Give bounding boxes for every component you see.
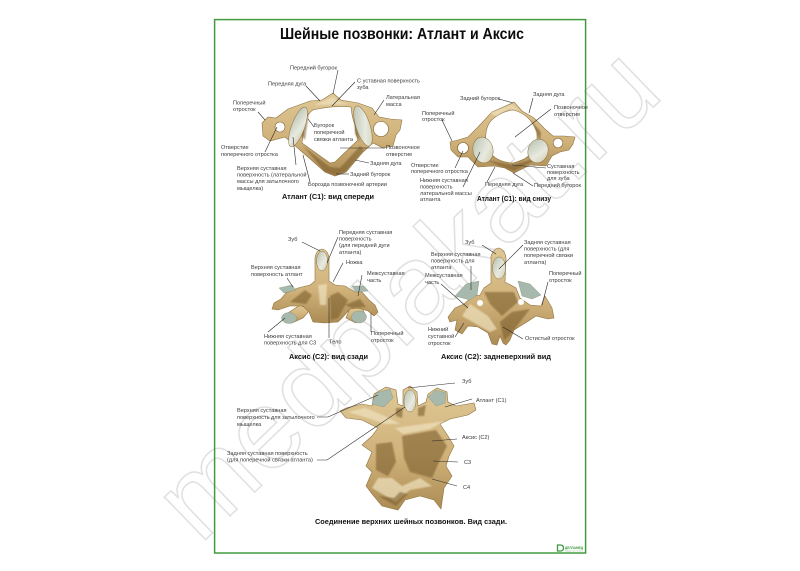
poster frame (215, 20, 586, 553)
label: верхняя суставная поверхность: мыщелка) (237, 186, 263, 192)
label: нижний суставной отросток: Нижний (428, 326, 448, 333)
label: позвоночное отверстие: отверстие (554, 112, 580, 118)
label: верхняя суставная поверхность: массы для затылочного (237, 179, 299, 185)
label: поперечный отросток (371, 313, 403, 344)
label: передняя дуга (268, 82, 320, 101)
label: задний бугорок (460, 95, 513, 103)
label: тело (329, 298, 341, 346)
label: поперечный отросток: отросток (422, 117, 445, 123)
label: верхняя суставная поверхность: поверхность для затылочного (237, 415, 315, 421)
label: позвоночное отверстие: Позвоночное (386, 145, 420, 151)
label: остистый отросток: Остистый отросток (525, 335, 575, 342)
label: бугорок поперечной связки: поперечной (314, 129, 345, 136)
label: нижняя суставная поверхность (264, 318, 316, 346)
label: бугорок поперечной связки (308, 119, 354, 143)
label: верхняя суставная поверхность: поверхность для (431, 258, 475, 264)
label: нижняя суставная поверхность (420, 152, 480, 203)
label: позвоночное отверстие: отверстие (386, 152, 412, 158)
panel: atlas front view (221, 64, 420, 201)
label: отверстие поперечного отростка (411, 151, 469, 175)
label: поперечный отросток (422, 110, 454, 141)
label: C3: С3 (464, 460, 471, 466)
illustration: atlas front (262, 93, 402, 176)
label: ножка: Ножка (346, 260, 363, 266)
publisher logo: ДЕЛЛАМЕД (565, 546, 584, 550)
label: латеральная масса: Латеральная (386, 95, 420, 101)
caption: junction: Соединение верхних шейных позвонков. Вид сзади. (315, 517, 507, 526)
label: передняя дуга (485, 167, 524, 188)
label: поперечный отросток: Поперечный (233, 100, 265, 106)
label: поперечный отросток: Поперечный (371, 330, 403, 337)
label: верхняя суставная поверхность: поверхность (латеральной (237, 172, 306, 178)
label: нижний суставной отросток (428, 323, 464, 347)
caption: axis posterior: Аксис (С2): вид сзади (289, 352, 368, 361)
label: атлант C1 (445, 398, 507, 407)
label: позвоночное отверстие (340, 145, 420, 158)
label: задний бугорок: Задний бугорок (350, 171, 391, 178)
label: задняя суставная поверхность: (для поперечной связки атланта) (227, 456, 313, 464)
label: верхняя суставная поверхность (237, 395, 378, 428)
label: суставная поверхность для зуба: для зуба (547, 176, 571, 182)
label: C3 (433, 460, 471, 466)
label: передняя дуга: Передняя дуга (268, 82, 307, 88)
label: задняя дуга: Задняя дуга (533, 92, 565, 98)
label: зуб: Зуб (465, 240, 474, 246)
panel: upper cervical vertebrae junction (227, 379, 507, 526)
label: передняя суставная поверхность: атланта) (339, 250, 362, 256)
publisher logo (558, 545, 584, 552)
label: нижний суставной отросток: отросток (428, 341, 451, 347)
title: Шейные позвонки: Атлант и Аксис (280, 26, 524, 43)
label: передний бугорок: Передний бугорок (534, 182, 582, 189)
label: задний бугорок (336, 171, 391, 178)
label: C4: С4 (463, 485, 470, 491)
label: поперечный отросток: отросток (371, 338, 394, 344)
label: борозда позвоночной артерии: Борозда позвоночной артерии (308, 181, 387, 188)
label: поперечный отросток: Поперечный (549, 270, 581, 277)
label: латеральная масса: масса (386, 102, 403, 108)
label: верхняя суставная поверхность: поверхность атлант (251, 272, 303, 278)
label: поперечный отросток: отросток (233, 107, 256, 113)
label: верхняя суставная поверхность: мыщелка (237, 422, 262, 428)
label: аксис C2: Аксис (С2) (462, 435, 490, 441)
label: передняя суставная поверхность: поверхность (339, 236, 372, 242)
label: передний бугорок (290, 64, 338, 94)
label: передняя суставная поверхность (327, 230, 392, 263)
label: верхняя суставная поверхность: Верхняя суставная (237, 166, 287, 172)
label: зуб (288, 237, 320, 251)
watermark: medplakat.ru (130, 23, 682, 562)
label: верхняя суставная поверхность (431, 252, 481, 290)
label: суставная поверхность для зуба: поверхность (547, 170, 580, 176)
label: нижняя суставная поверхность: Нижняя суставная (420, 178, 468, 184)
label: отверстие поперечного отростка (221, 127, 279, 158)
illustration: axis posterosuperior (448, 248, 554, 345)
label: нижний суставной отросток: суставной (428, 333, 454, 340)
panel: atlas inferior view (411, 92, 588, 203)
label: отверстие поперечного отростка: Отверстие (221, 145, 249, 151)
illustration: atlas from below (450, 102, 575, 173)
label: нижняя суставная поверхность: поверхность (420, 184, 453, 190)
label: задняя суставная поверхность: Задняя суставная поверхность (227, 451, 308, 457)
label: суставная поверхность для зуба: Суставная (547, 164, 574, 170)
label: отверстие поперечного отростка: поперечного отростка (411, 169, 469, 175)
label: зуб: Зуб (288, 237, 297, 243)
label: верхняя суставная поверхность: Верхняя суставная (431, 252, 481, 258)
label: задняя дуга (355, 160, 402, 167)
label: суставная поверхность зуба (332, 78, 420, 106)
label: передняя суставная поверхность: Передняя суставная (339, 230, 392, 236)
panel: axis posterosuperior view (425, 240, 581, 361)
illustration: C1–C4 posterior view (340, 386, 476, 510)
label: поперечный отросток (233, 100, 265, 120)
label: аксис C2 (432, 435, 490, 441)
label: верхняя суставная поверхность: Верхняя суставная (237, 408, 287, 414)
label: верхняя суставная поверхность: Верхняя суставная (251, 265, 301, 271)
label: суставная поверхность для зуба (512, 164, 580, 182)
label: задняя суставная поверхность (499, 240, 573, 269)
label: поперечный отросток (542, 270, 581, 305)
label: межсуставная часть: часть (367, 278, 381, 284)
label: бугорок поперечной связки: связки атланта (314, 137, 354, 143)
label: межсуставная часть (358, 271, 405, 296)
caption: axis posterosuperior: Аксис (С2): задневерхний вид (441, 352, 551, 361)
label: C4 (432, 479, 470, 491)
panel: axis posterior view (251, 230, 405, 361)
label: верхняя суставная поверхность (237, 137, 306, 192)
label: задняя суставная поверхность: Задняя суставная (524, 240, 571, 246)
label: зуб (408, 379, 471, 388)
label: суставная поверхность зуба: зуба (357, 85, 369, 91)
label: нижняя суставная поверхность: атланта (420, 197, 441, 203)
label: отверстие поперечного отростка: поперечного отростка (221, 152, 279, 158)
label: задняя дуга: Задняя дуга (370, 161, 402, 167)
label: задняя дуга (529, 92, 565, 113)
label: верхняя суставная поверхность: атланта (431, 265, 452, 271)
label: позвоночное отверстие (515, 105, 588, 137)
label: позвоночное отверстие: Позвоночное (554, 105, 588, 111)
caption: atlas below: Атлант (С1): вид снизу (477, 194, 552, 203)
label: передний бугорок (513, 173, 582, 189)
label: передняя суставная поверхность: (для передней дуги (339, 242, 390, 249)
caption: atlas front: Атлант (С1): вид спереди (282, 192, 374, 201)
label: передний бугорок: Передний бугорок (290, 64, 338, 72)
label: бугорок поперечной связки: Бугорок (314, 123, 335, 129)
label: межсуставная часть: часть (425, 280, 439, 286)
illustration: axis posterior (272, 249, 378, 324)
label: атлант C1: Атлант (С1) (476, 398, 507, 404)
label: задняя суставная поверхность: поверхность (для (524, 246, 569, 252)
label: задний бугорок: Задний бугорок (460, 95, 501, 102)
label: нижняя суставная поверхность: Нижняя суставная (264, 334, 312, 340)
label: межсуставная часть (425, 273, 468, 308)
publisher logo: медицинские плакаты (565, 550, 583, 552)
label: поперечный отросток: отросток (549, 278, 572, 284)
label: тело: Тело (329, 340, 341, 346)
label: задняя суставная поверхность: поперечной связки (524, 252, 573, 259)
label: суставная поверхность зуба: С уставная поверхность (357, 78, 420, 84)
label: остистый отросток (503, 327, 575, 342)
label: борозда позвоночной артерии (303, 155, 387, 188)
label: поперечный отросток: Поперечный (422, 110, 454, 117)
label: нижняя суставная поверхность: латеральной массы (420, 190, 472, 197)
label: верхняя суставная поверхность (251, 265, 303, 287)
label: межсуставная часть: Межсуставная (367, 271, 405, 277)
label: передняя дуга: Передняя дуга (485, 182, 524, 188)
label: ножка (333, 260, 363, 282)
label: задняя суставная поверхность: атланта) (524, 260, 547, 266)
label: межсуставная часть: Межсуставная (425, 273, 463, 279)
label: зуб: Зуб (462, 379, 471, 385)
label: зуб (465, 240, 496, 254)
label: задняя суставная поверхность (227, 407, 405, 464)
label: латеральная масса (374, 95, 420, 115)
label: отверстие поперечного отростка: Отверстие (411, 163, 439, 169)
label: нижняя суставная поверхность: поверхность для С3 (264, 340, 316, 346)
